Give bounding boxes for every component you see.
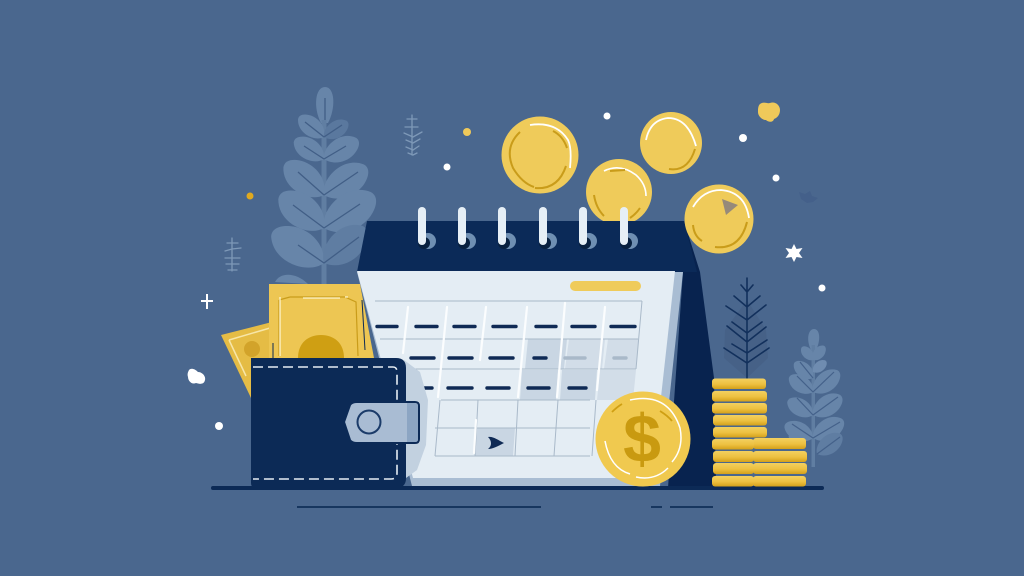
left stack (712, 378, 767, 486)
coin: behind calendar (586, 159, 652, 225)
calendar page edge (357, 272, 683, 486)
background sparkles and dots (188, 102, 825, 430)
calendar stand (668, 221, 716, 488)
plant: right leaf (781, 329, 849, 467)
binder rings (418, 207, 638, 249)
calendar white dividers (403, 303, 605, 453)
ground line (211, 486, 824, 507)
coin: right with arrow mark (684, 184, 754, 254)
banknote: front (269, 284, 374, 358)
plant: small sprig top (404, 115, 422, 155)
coin: top left (502, 116, 578, 194)
plant: small sprig left (225, 238, 241, 271)
right stack (753, 438, 807, 486)
shaded calendar cells (475, 339, 639, 456)
calendar header (357, 221, 697, 272)
calendar page (357, 271, 675, 478)
dollar coin (596, 392, 690, 486)
wallet body (251, 358, 406, 488)
calendar grid lines (375, 301, 642, 456)
wallet stitching (253, 367, 397, 479)
calendar date dashes (377, 326, 635, 388)
calendar (357, 207, 716, 488)
wallet clasp (344, 402, 419, 443)
dollar sign: $ (623, 401, 661, 477)
coin stacks (712, 378, 807, 486)
coin: top right (640, 112, 702, 174)
wallet (251, 358, 419, 488)
calendar small marker (488, 437, 504, 449)
plant: dark branch (724, 278, 769, 378)
highlight pill (570, 281, 641, 291)
wallet shadow on page (404, 360, 428, 478)
banknote: back (221, 322, 272, 398)
plant: large left leaf (263, 87, 384, 285)
